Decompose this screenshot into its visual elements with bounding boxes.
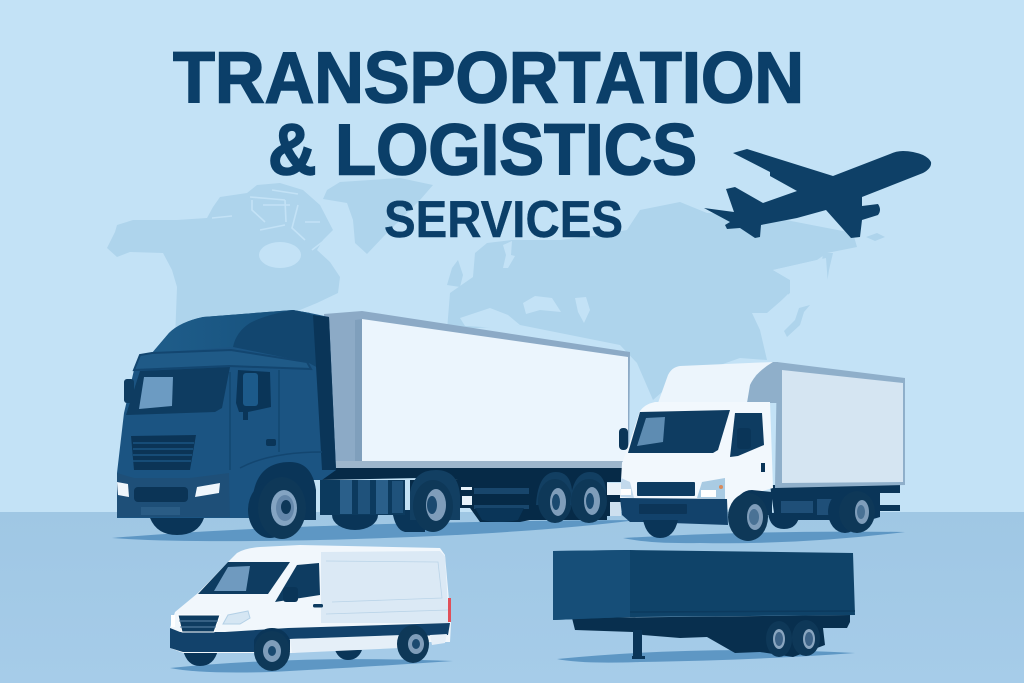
rear skirt <box>430 634 447 645</box>
front lamp <box>171 615 175 627</box>
door seam lines <box>230 370 322 470</box>
trailer wheel two <box>570 472 607 523</box>
front wheel <box>728 493 768 541</box>
lower skirt <box>290 635 402 653</box>
fuel tank <box>320 480 405 515</box>
number plate <box>141 507 180 515</box>
visor <box>134 350 311 370</box>
mediterranean <box>460 308 520 328</box>
windshield highlight <box>637 417 665 446</box>
tail light <box>448 598 451 622</box>
wheel one <box>766 621 792 657</box>
korea and japan sea <box>765 294 791 330</box>
white sea <box>503 241 515 268</box>
wheel two <box>792 620 820 656</box>
trailer shadow <box>557 650 855 663</box>
cab <box>620 402 773 510</box>
panel lines <box>326 561 448 614</box>
title: and logistics: & LOGISTICS <box>268 110 697 190</box>
front wheel arch <box>728 490 772 515</box>
van shadow <box>170 659 453 672</box>
side mirror <box>619 428 628 450</box>
subtitle: services: SERVICES <box>384 191 623 249</box>
title: transportation: TRANSPORTATION <box>173 38 804 118</box>
grille <box>178 615 220 632</box>
windshield <box>126 367 230 415</box>
window mirror <box>737 428 751 449</box>
cab body <box>117 310 336 518</box>
british isles <box>447 260 463 287</box>
cargo box <box>775 362 905 488</box>
headlight left <box>117 482 129 497</box>
trailer undercarriage <box>572 615 850 657</box>
world map <box>107 178 885 400</box>
headlight right <box>697 478 725 499</box>
door handle <box>266 439 276 446</box>
indicator <box>719 485 723 489</box>
trailer unit <box>553 550 855 663</box>
headlight right <box>195 483 220 497</box>
front bumper <box>117 473 230 517</box>
cab roof fairing <box>152 310 310 353</box>
cargo van <box>170 545 453 672</box>
north america <box>107 183 340 340</box>
kamchatka <box>821 253 833 283</box>
greenland <box>323 178 433 254</box>
front wheel <box>248 477 306 539</box>
rear tractor wheel <box>410 470 460 532</box>
rear wheel <box>397 625 429 663</box>
chassis <box>770 485 900 520</box>
truck shadow <box>112 520 637 541</box>
grille <box>637 482 695 496</box>
trailer chassis <box>320 468 622 522</box>
sky background <box>0 0 1024 512</box>
far wheels <box>183 650 362 666</box>
arctic channels <box>212 190 325 250</box>
black sea <box>523 296 561 314</box>
door window glass <box>243 373 258 406</box>
trailer box <box>324 311 630 468</box>
van mirror <box>283 587 298 602</box>
hudson bay <box>259 242 301 268</box>
caspian sea <box>575 297 590 323</box>
box truck <box>619 362 905 543</box>
front under wheel <box>643 520 678 538</box>
japan <box>784 305 810 337</box>
big semi truck <box>112 310 637 541</box>
trailer wheel one <box>536 472 572 523</box>
door window <box>236 370 271 420</box>
truck shadow <box>623 532 905 543</box>
door handle <box>761 463 765 472</box>
far wheels <box>332 500 524 532</box>
van body <box>170 545 451 653</box>
icon: airplane <box>704 149 931 238</box>
lower intake <box>639 504 687 514</box>
cab roof dark section <box>233 310 322 370</box>
rear wheel <box>828 491 875 533</box>
side window <box>275 563 320 602</box>
ground <box>0 512 1024 683</box>
wheel arch <box>253 462 316 520</box>
front wheel <box>254 628 290 671</box>
windshield highlight <box>214 566 250 591</box>
windshield <box>198 562 290 594</box>
bumper <box>620 498 728 525</box>
cab rear strip <box>313 315 336 470</box>
headlight left <box>621 478 634 498</box>
headlight <box>223 611 250 624</box>
east asia islands <box>866 233 885 241</box>
landing leg <box>632 630 645 659</box>
lower grille <box>134 487 188 502</box>
windshield <box>628 410 730 453</box>
door handle <box>313 604 323 608</box>
side window <box>730 413 764 457</box>
side mirror <box>124 379 134 403</box>
windshield highlight <box>139 377 173 409</box>
grille <box>131 435 196 470</box>
headlight right lamp <box>701 490 716 497</box>
map water details <box>259 241 828 330</box>
front under wheel <box>150 518 204 535</box>
dark body band <box>170 623 450 652</box>
middle wheel <box>768 513 800 529</box>
fairing side <box>747 362 778 403</box>
headlight left lamp <box>621 489 631 495</box>
cargo panel <box>321 551 449 623</box>
eurasia and africa <box>447 202 857 400</box>
roof fairing <box>658 362 773 403</box>
okhotsk sea <box>773 258 828 285</box>
trailer box <box>553 550 855 620</box>
